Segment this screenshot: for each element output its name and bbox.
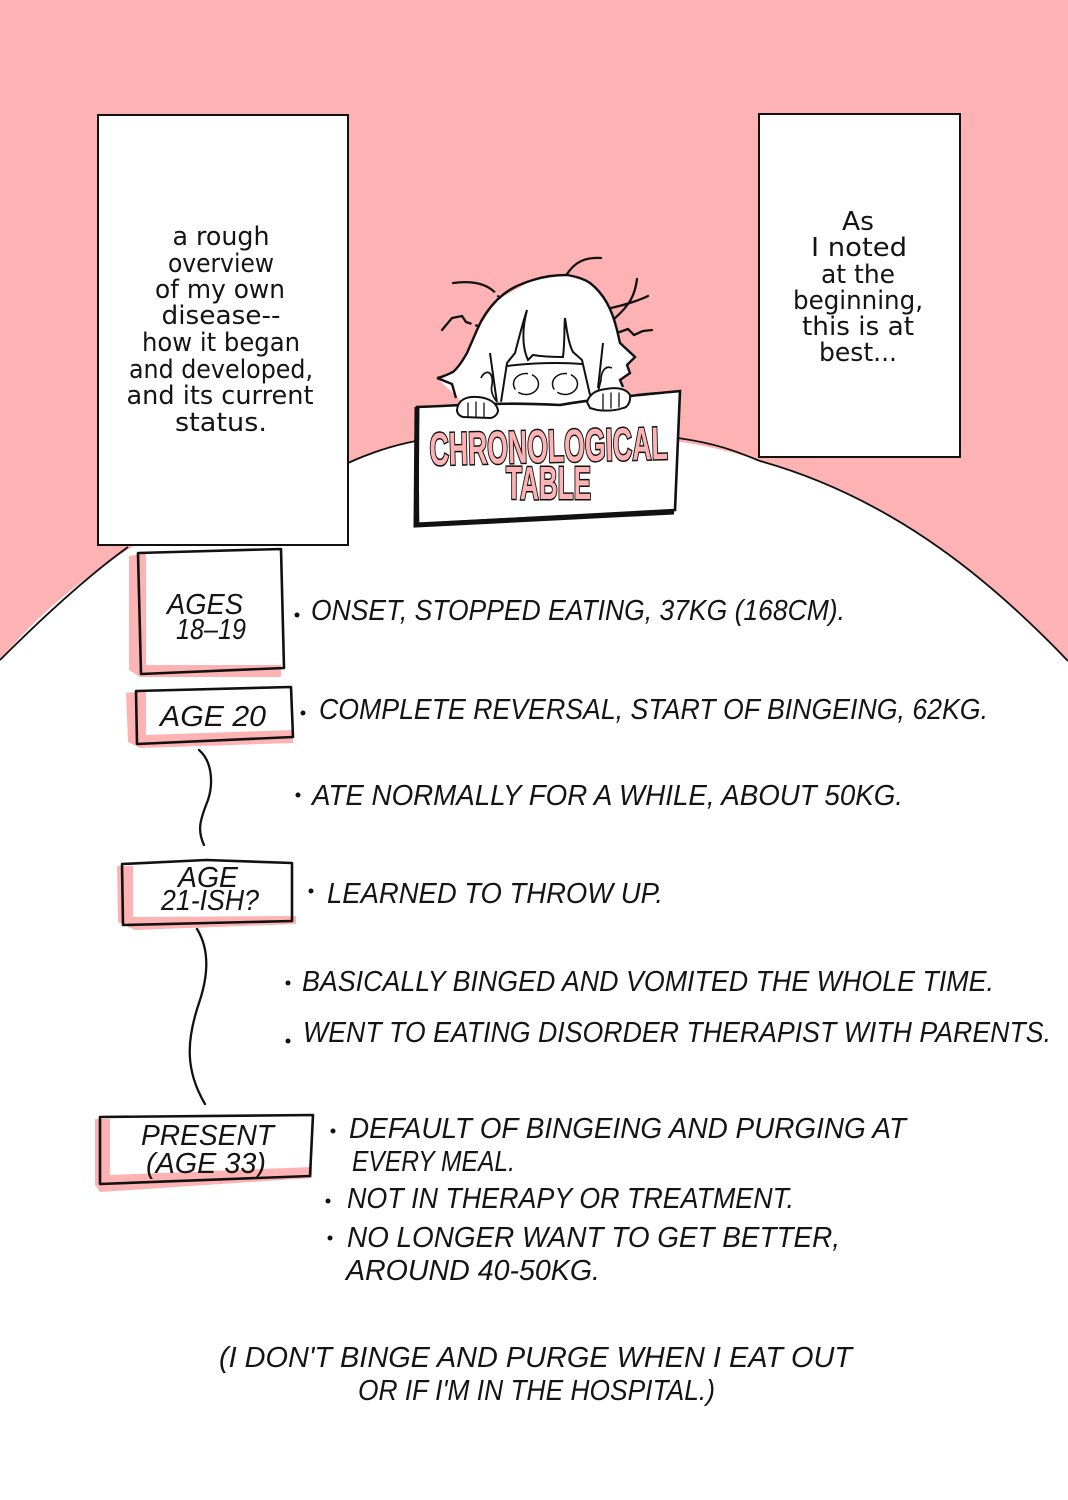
panel: overview caption	[98, 115, 348, 545]
panel: overview caption: disease--	[162, 301, 280, 331]
timeline entries: NOT IN THERAPY OR TREATMENT.	[347, 1183, 794, 1215]
panel: as noted caption: I noted	[811, 233, 907, 263]
panel: overview caption: and its current	[126, 381, 314, 411]
icon: right hand	[587, 388, 630, 411]
label: present age 33: PRESENT	[141, 1120, 276, 1152]
timeline entries: AROUND 40-50KG.	[344, 1255, 600, 1287]
label: present age 33	[95, 1115, 313, 1192]
sign: chronological table: CHRONOLOGICAL	[429, 417, 668, 475]
label: age 21-ish: 21-ISH?	[160, 885, 260, 917]
character peeking over sign	[437, 258, 652, 410]
panel: overview caption: of my own	[155, 275, 285, 305]
icon: left hand	[457, 397, 498, 418]
timeline entries: COMPLETE REVERSAL, START OF BINGEING, 62KG.	[319, 694, 988, 726]
timeline entries: ATE NORMALLY FOR A WHILE, ABOUT 50KG.	[310, 780, 903, 812]
panel: overview caption: and developed,	[129, 355, 313, 385]
panel: as noted caption: beginning,	[793, 286, 923, 316]
label: age 21-ish	[117, 860, 296, 930]
panel: overview caption: overview	[168, 249, 274, 279]
footnote	[219, 1342, 854, 1407]
label: ages 18-19	[129, 549, 284, 677]
timeline entries: DEFAULT OF BINGEING AND PURGING AT	[349, 1113, 908, 1145]
label: age 20: AGE 20	[158, 701, 266, 733]
timeline entries: EVERY MEAL.	[352, 1146, 515, 1178]
label: age 20	[126, 687, 293, 748]
panel: overview caption: how it began	[142, 328, 300, 358]
footnote: OR IF I'M IN THE HOSPITAL.)	[358, 1375, 715, 1407]
timeline entries: NO LONGER WANT TO GET BETTER,	[347, 1222, 840, 1254]
connector line	[199, 750, 211, 845]
panel: overview caption: status.	[175, 408, 267, 438]
label: ages 18-19: 18–19	[176, 614, 246, 646]
connector line	[190, 929, 206, 1104]
panel: as noted caption	[759, 114, 960, 457]
label: ages 18-19: AGES	[165, 589, 244, 621]
sign: chronological table	[416, 391, 680, 525]
sign: chronological table: TABLE	[506, 457, 591, 509]
panel: as noted caption: best...	[819, 338, 897, 368]
panel: as noted caption: at the	[821, 260, 895, 290]
label: present age 33: (AGE 33)	[146, 1148, 266, 1180]
label: age 21-ish: AGE	[176, 862, 239, 894]
panel: as noted caption: As	[842, 207, 874, 237]
timeline entries: BASICALLY BINGED AND VOMITED THE WHOLE TIME.	[302, 966, 994, 998]
footnote: (I DON'T BINGE AND PURGE WHEN I EAT OUT	[219, 1342, 854, 1374]
timeline entries	[286, 595, 1051, 1287]
panel: as noted caption: this is at	[802, 312, 914, 342]
panel: overview caption: a rough	[172, 222, 270, 252]
timeline entries: LEARNED TO THROW UP.	[327, 878, 663, 910]
timeline entries: ONSET, STOPPED EATING, 37KG (168CM).	[311, 595, 845, 627]
